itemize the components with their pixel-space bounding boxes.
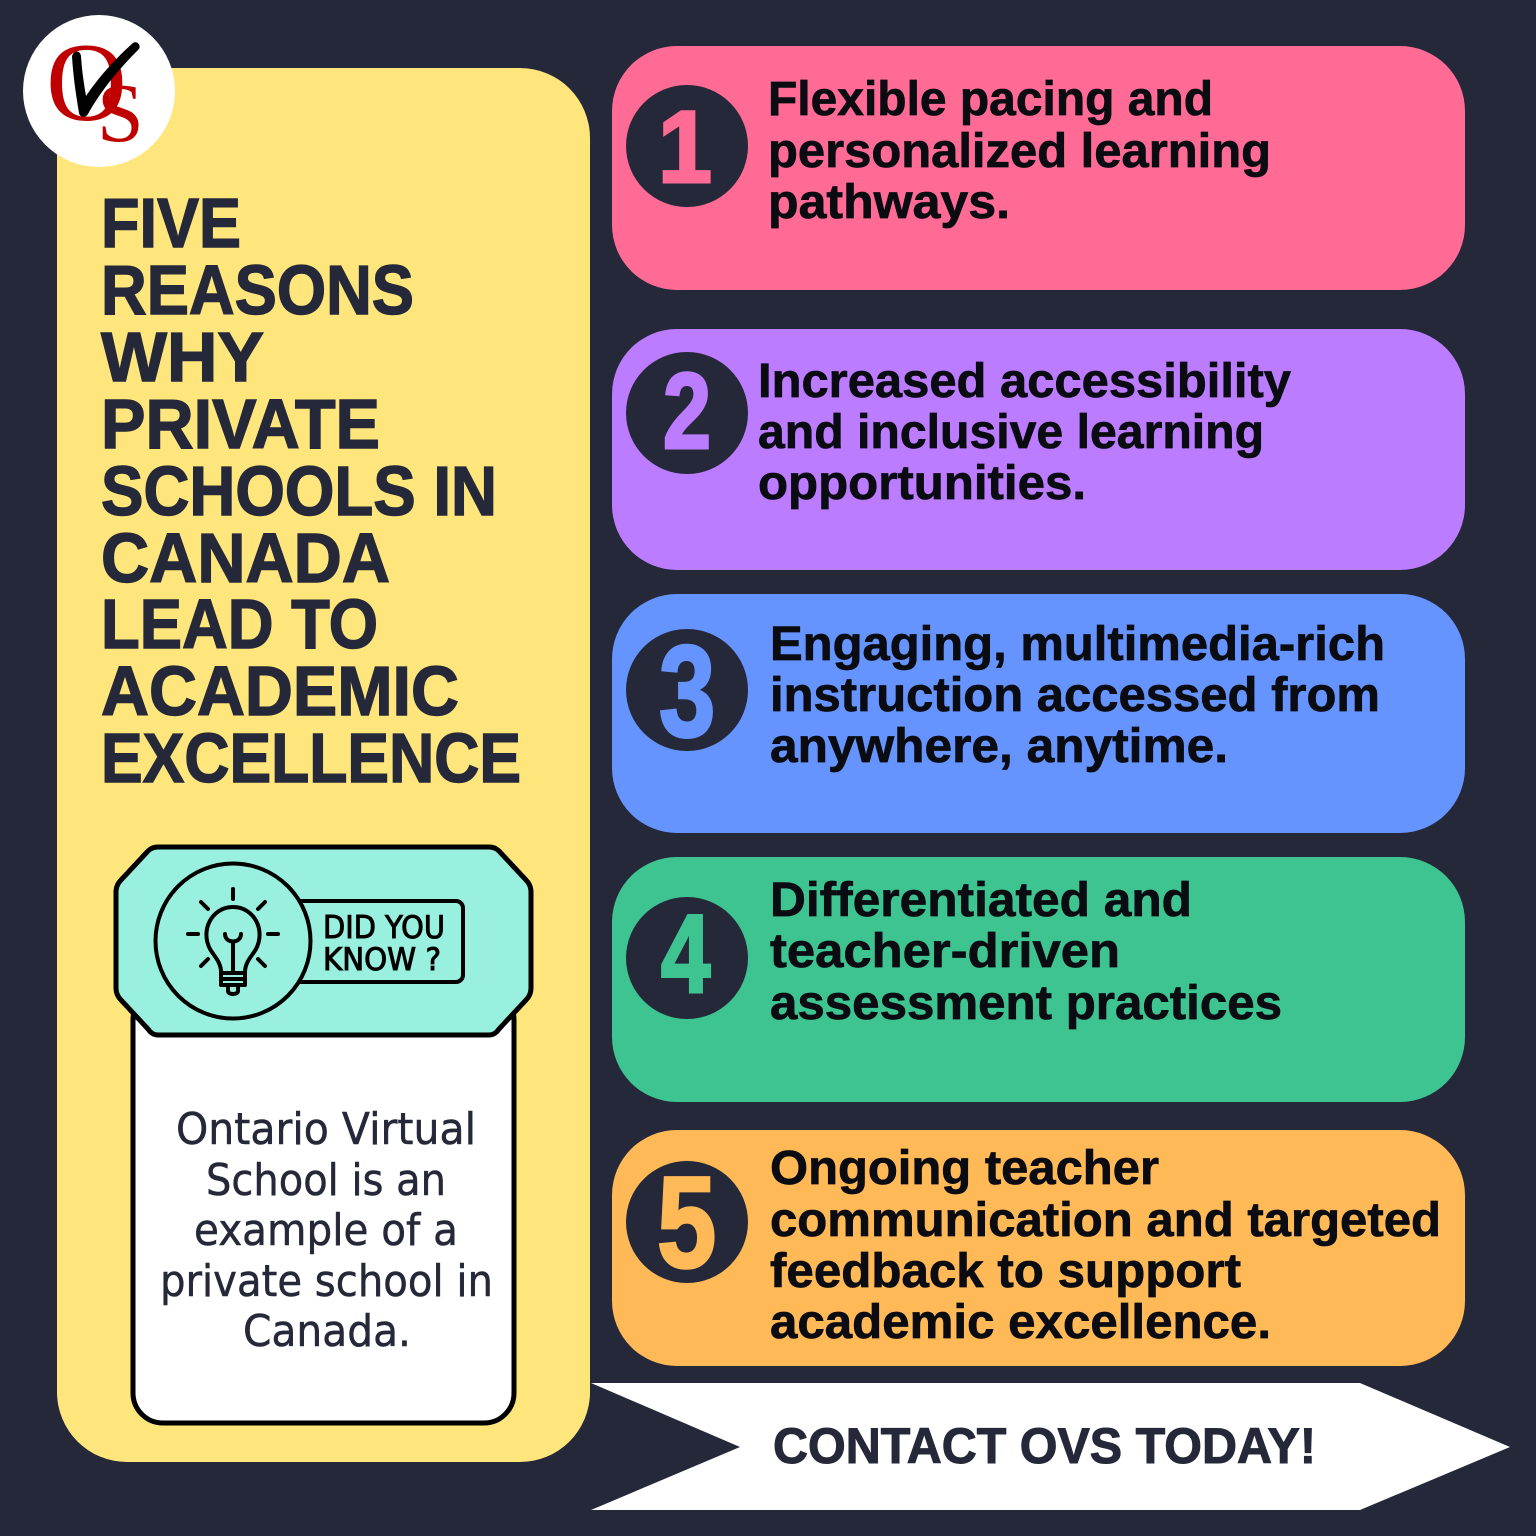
text: reason 2 — [758, 355, 1291, 510]
text block: Ontario Virtual School fact: example of a — [194, 1205, 458, 1256]
icon: OVS logo — [23, 15, 175, 167]
text: reason 2: opportunities. — [758, 457, 1086, 510]
text block: Ontario Virtual School fact: private school in — [160, 1256, 493, 1307]
text: reason 3: Engaging, multimedia-rich — [770, 618, 1385, 671]
arrow: contact call to action: CONTACT OVS TODAY! — [773, 1418, 1316, 1474]
text: reason 3: anywhere, anytime. — [770, 720, 1228, 773]
number badge 3: 3 — [659, 618, 715, 764]
text: reason 5: academic excellence. — [770, 1296, 1271, 1349]
text: reason 5: Ongoing teacher — [770, 1142, 1159, 1195]
title: LEAD TO — [101, 585, 378, 663]
title: CANADA — [101, 519, 390, 597]
number badge 1 — [626, 85, 748, 207]
title: WHY — [101, 318, 264, 396]
icon: light bulb — [156, 864, 310, 1018]
title: SCHOOLS IN — [101, 452, 497, 530]
icon: OVS logo: S — [97, 67, 144, 160]
panel: left yellow title panel — [57, 68, 590, 1462]
text: reason 1: Flexible pacing and — [768, 73, 1213, 126]
text: reason 4 — [770, 874, 1282, 1030]
number badge 1: 1 — [658, 91, 712, 205]
text block: Ontario Virtual School fact: Canada. — [243, 1306, 411, 1357]
text: reason 4: teacher-driven — [770, 925, 1120, 978]
text: reason 3 — [770, 618, 1385, 773]
panel: reason 2 — [612, 329, 1465, 570]
title: REASONS — [101, 251, 414, 329]
text: reason 5: communication and targeted — [770, 1194, 1441, 1247]
text block: Ontario Virtual School fact: Ontario Virtual — [176, 1104, 476, 1155]
icon: OVS logo: O — [46, 21, 127, 145]
panel: reason 1 — [612, 46, 1465, 290]
number badge 4 — [626, 893, 748, 1019]
number badge 3 — [626, 618, 748, 764]
arrow: contact call to action — [591, 1383, 1510, 1510]
number badge 5 — [626, 1150, 748, 1295]
panel: reason 3 — [612, 594, 1465, 833]
text: reason 4: Differentiated and — [770, 874, 1192, 927]
text block: Ontario Virtual School fact — [160, 1104, 493, 1357]
text block: Ontario Virtual School fact: School is an — [206, 1155, 446, 1206]
number badge 2: 2 — [663, 350, 711, 471]
text: reason 3: instruction accessed from — [770, 669, 1380, 722]
title — [101, 184, 521, 797]
number badge 4: 4 — [661, 893, 710, 1016]
title: EXCELLENCE — [101, 719, 521, 797]
label: did you know: DID YOU — [323, 910, 445, 946]
panel: fact card body — [133, 990, 514, 1423]
text: reason 1 — [768, 73, 1271, 229]
title: FIVE — [101, 184, 241, 262]
title: ACADEMIC — [101, 652, 459, 730]
panel: did you know banner — [116, 847, 531, 1035]
number badge 5: 5 — [657, 1150, 716, 1295]
number badge 2 — [626, 350, 748, 474]
text: reason 4: assessment practices — [770, 977, 1282, 1030]
panel: reason 5 — [612, 1130, 1465, 1366]
text: reason 1: personalized learning — [768, 125, 1271, 178]
text: reason 5: feedback to support — [770, 1245, 1241, 1298]
text: reason 1: pathways. — [768, 176, 1010, 229]
text: reason 2: and inclusive learning — [758, 406, 1264, 459]
label: did you know — [290, 901, 463, 982]
text: reason 5 — [770, 1142, 1441, 1349]
label: did you know: KNOW ? — [323, 942, 441, 978]
panel: reason 4 — [612, 857, 1465, 1102]
title: PRIVATE — [101, 385, 380, 463]
text: reason 2: Increased accessibility — [758, 355, 1291, 408]
